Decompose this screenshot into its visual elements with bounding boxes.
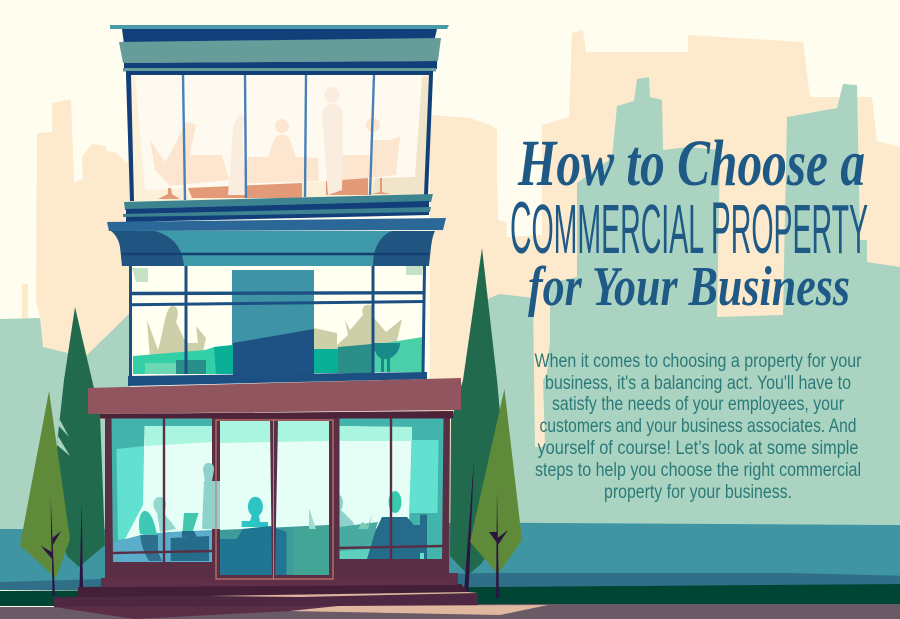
ground floor [54,378,478,607]
doors [216,420,333,579]
middle floor sill [128,372,427,386]
tree: front left [20,391,70,596]
middle floor window [130,266,425,376]
awning shadow [100,411,453,418]
teal water band [0,523,900,590]
intro paragraph: satisfy the needs of your employees, your [552,394,845,415]
intro paragraph: property for your business. [604,482,792,503]
road [0,604,900,619]
middle cornice [107,218,446,266]
pavement shadow and light [54,605,548,619]
skyline: peach buildings [22,30,900,530]
intro paragraph: business, it's a balancing act. You'll have to [545,373,851,394]
dark green ground strip [0,584,900,606]
darker teal band [0,573,900,590]
intro paragraph [534,351,862,503]
window frame [126,75,433,201]
top floor window [126,75,433,202]
top floor ledge [123,194,433,222]
tree: front right [470,389,522,598]
window frame [131,291,424,295]
tree: back right [450,248,510,592]
building [54,25,478,607]
window frame bars [113,418,443,562]
intro paragraph: yourself of course! Let’s look at some simple [538,438,858,459]
silhouettes [150,118,400,186]
tree: back left [33,307,105,587]
right window [340,418,444,559]
title [510,127,868,318]
middle floor [107,218,446,386]
top cornice [110,25,449,76]
left window [112,418,225,562]
skyline: mint buildings [0,77,900,532]
ground floor wall [105,414,450,578]
top floor [110,25,449,222]
silhouettes [147,305,402,358]
steps [54,573,478,607]
ground floor awning [88,378,461,414]
